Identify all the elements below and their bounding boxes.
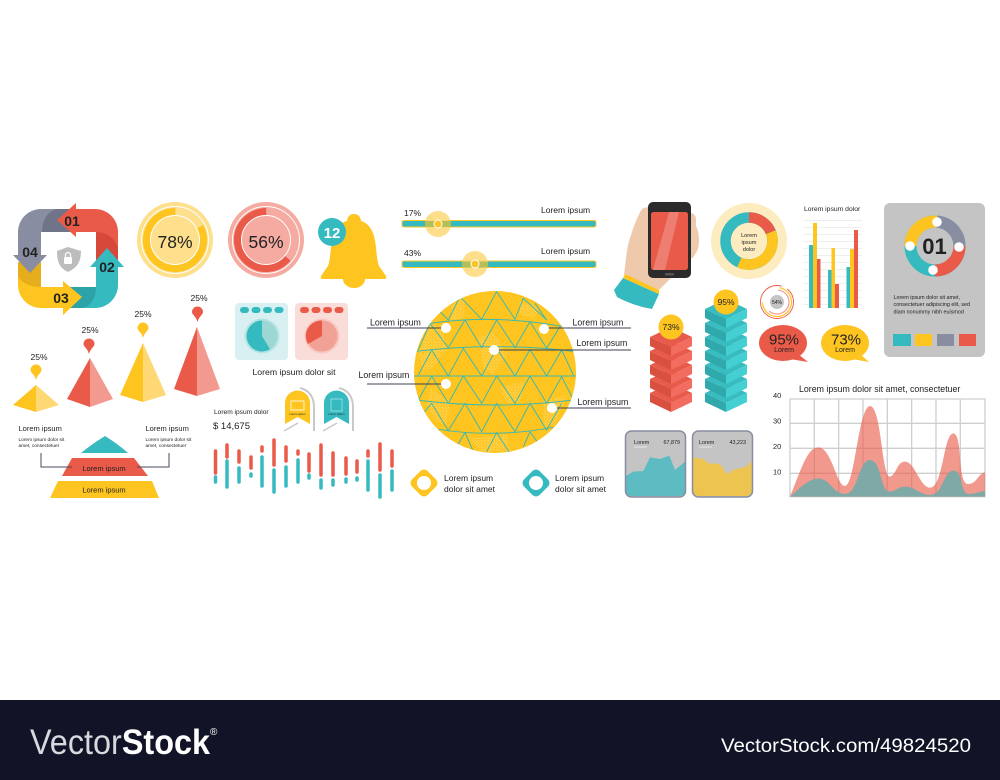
icon: teal diamond with caption [520, 467, 607, 499]
text block: right pyramid caption [146, 424, 192, 449]
layered pyramid: Lorem ipsum [82, 486, 126, 494]
speech bubble 95% [759, 325, 808, 362]
icon: teal bookmark badge [323, 388, 353, 431]
panel: grey info card [884, 203, 985, 357]
area chart: Lorem ipsum dolor sit amet, consectetuer [799, 384, 960, 394]
slider 43%: Lorem ipsum [541, 246, 590, 256]
icon: notification bell [318, 214, 386, 288]
pyramid chart 3: 25% [134, 309, 152, 319]
area chart: 30 [773, 416, 781, 426]
text block: right pyramid caption: amet, consectetuer [146, 443, 187, 449]
pyramid chart 4 [174, 293, 220, 396]
speech bubble 73%: 73% [831, 332, 861, 348]
globe callout right bottom [547, 397, 631, 413]
pyramid chart 4: 25% [190, 293, 208, 303]
globe callout left top [367, 318, 451, 333]
pyramid chart 1: 25% [30, 352, 48, 362]
panel: grey info card: diam nonummy nibh euismod [894, 310, 964, 316]
arrow label 03: 03 [53, 290, 69, 306]
isometric red stack 73% [650, 314, 692, 412]
donut gauge 78% [137, 202, 213, 278]
globe callout right top [539, 318, 631, 334]
registered mark: ® [210, 727, 218, 738]
layered pyramid: Lorem ipsum [82, 464, 126, 473]
donut gauge 78%: 78% [157, 232, 193, 252]
footer band [0, 700, 1000, 780]
text block: left pyramid caption: Lorem ipsum dolor sit [18, 437, 65, 443]
footer image id: VectorStock.com/49824520 [721, 736, 971, 757]
globe callout left bottom: Lorem ipsum [358, 370, 409, 380]
slider 43%: 43% [404, 248, 421, 258]
text block: left pyramid caption [18, 424, 65, 449]
icon: yellow bookmark badge: Lorem ipsum [289, 412, 306, 416]
isometric teal stack 95%: 95% [717, 297, 735, 307]
icon: shield with lock [57, 247, 81, 272]
text block: left pyramid caption: Lorem ipsum [18, 424, 62, 433]
mini area card 67,879 [626, 431, 686, 497]
panel: teal washing-machine pie [235, 303, 288, 360]
pyramid chart 1 [13, 352, 59, 412]
donut chart [711, 203, 787, 279]
arrow label 04: 04 [22, 244, 38, 260]
icon: teal diamond with caption: dolor sit amet [555, 484, 607, 494]
icon: yellow diamond with caption: Lorem ipsum [444, 473, 493, 483]
icon: teal diamond with caption: Lorem ipsum [555, 473, 604, 483]
value block [213, 409, 269, 432]
area chart [773, 384, 985, 497]
arrow label 02: 02 [99, 259, 115, 275]
value block: $ 14,675 [213, 421, 250, 432]
world globe [412, 291, 578, 453]
bar chart: Lorem ipsum dolor [804, 206, 861, 213]
speech bubble 73%: Lorem [835, 347, 855, 354]
isometric teal stack 95% [705, 290, 747, 412]
panel: grey info card: consectetuer adipiscing elit, sed [894, 302, 970, 308]
area chart: 10 [773, 468, 781, 476]
area chart: 20 [773, 442, 781, 451]
cycle diagram with four arrows [13, 203, 124, 315]
bar chart [803, 206, 862, 308]
donut chart: ipsum [742, 240, 757, 246]
icon: hand holding smartphone [614, 202, 699, 309]
mini area card 43,223 [692, 431, 752, 497]
speech bubble 95%: 95% [769, 332, 799, 348]
icon: notification bell: 12 [324, 225, 340, 242]
globe callout right middle: Lorem ipsum [576, 338, 627, 348]
icon: yellow diamond with caption: dolor sit amet [444, 484, 496, 494]
panel caption: Lorem ipsum dolor sit [252, 367, 336, 377]
icon: teal bookmark badge: Lorem ipsum [328, 412, 345, 416]
panel: grey info card: Lorem ipsum dolor sit amet, [894, 295, 961, 301]
globe callout right top: Lorem ipsum [572, 318, 623, 328]
mini area card 67,879: Lorem [634, 440, 650, 446]
slider 17%: 17% [404, 208, 421, 218]
globe callout left top: Lorem ipsum [370, 318, 421, 328]
radial gauge 54%: 54% [772, 300, 783, 306]
isometric red stack 73%: 73% [662, 322, 680, 332]
icon: yellow diamond with caption [408, 467, 496, 499]
globe callout left bottom [358, 370, 451, 389]
text block: right pyramid caption: Lorem ipsum dolor sit [146, 437, 192, 443]
slider 17%: Lorem ipsum [541, 205, 590, 215]
speech bubble 95%: Lorem [774, 347, 794, 354]
value block: Lorem ipsum dolor [214, 409, 269, 416]
donut gauge 56% [227, 201, 305, 279]
icon: yellow bookmark badge [284, 388, 314, 431]
globe callout right middle [489, 338, 631, 355]
arrow label 01: 01 [64, 213, 80, 229]
panel: red washing-machine pie [295, 303, 348, 360]
radial gauge 54% [760, 285, 794, 319]
chart: split bars [216, 440, 392, 497]
pyramid chart 2: 25% [81, 325, 99, 335]
donut gauge 56%: 56% [248, 232, 284, 252]
layered pyramid [41, 436, 169, 498]
pyramid chart 3 [120, 309, 166, 402]
slider 17% [402, 205, 596, 237]
mini area card 43,223: Lorem [699, 440, 715, 446]
donut chart: Lorem [741, 233, 757, 239]
mini area card 43,223: 43,223 [730, 440, 746, 446]
panel: grey info card: 01 [922, 234, 947, 259]
pyramid chart 2 [67, 325, 113, 407]
text block: left pyramid caption: amet, consectetuer [18, 443, 60, 449]
mini area card 67,879: 67,879 [664, 440, 680, 446]
footer logo: VectorStock [30, 723, 210, 762]
donut chart: dolor [743, 247, 755, 253]
speech bubble 73% [821, 325, 869, 362]
slider 43% [402, 246, 596, 277]
globe callout right bottom: Lorem ipsum [578, 397, 628, 407]
text block: right pyramid caption: Lorem ipsum [146, 424, 189, 433]
area chart: 40 [773, 391, 781, 400]
